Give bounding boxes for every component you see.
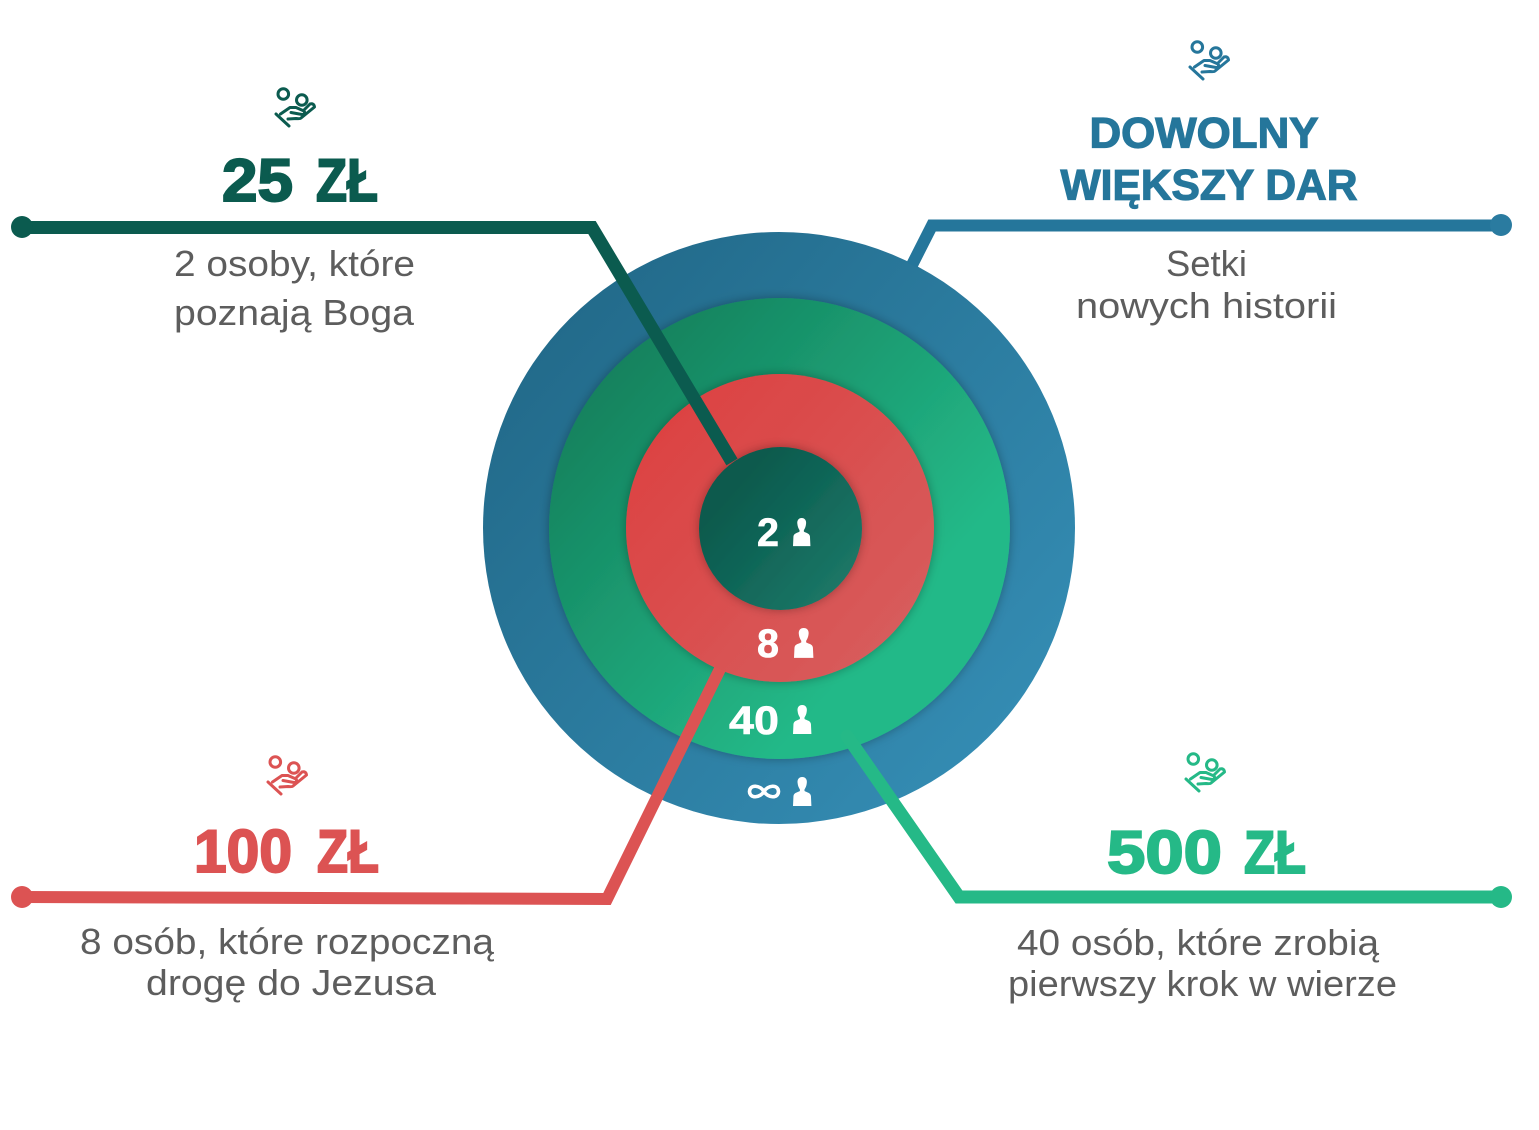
description: 40 people: pierwszy krok w wierze xyxy=(1008,963,1397,1004)
connector: red xyxy=(11,669,720,908)
count label: 2 people: 2 xyxy=(757,511,779,555)
heading: dowolny większy dar xyxy=(1060,110,1358,210)
count label: 2 people xyxy=(757,511,810,555)
panel: 25 zł xyxy=(174,89,415,333)
icon: hand dark green xyxy=(276,89,314,126)
description: 8 people: 8 osób, które rozpoczną xyxy=(80,921,495,962)
count label: 8 people xyxy=(757,622,813,666)
icon: hand red xyxy=(268,757,306,794)
target diagram xyxy=(483,232,1075,824)
panel: 100 zł xyxy=(80,757,495,1003)
description: 8 people xyxy=(80,921,495,1003)
description: 40 people: 40 osób, które zrobią xyxy=(1017,922,1380,963)
heading: 25 zł: ZŁ xyxy=(316,147,378,214)
icon: hand green xyxy=(1186,754,1224,791)
connector: blue xyxy=(912,214,1512,265)
ring: red xyxy=(626,374,934,682)
description: 2 people: poznają Boga xyxy=(174,292,415,333)
heading: 500 zł: 500 xyxy=(1107,819,1222,886)
description: 2 people xyxy=(174,243,415,333)
count label: 40 people xyxy=(729,699,811,743)
heading: 500 zł: ZŁ xyxy=(1244,819,1306,886)
count label: 40 people: 40 xyxy=(729,699,779,743)
description: hundreds xyxy=(1076,243,1337,326)
connector: green xyxy=(847,736,1512,908)
heading: 100 zł: ZŁ xyxy=(317,818,379,885)
description: hundreds: nowych historii xyxy=(1076,285,1337,326)
panel: 500 zł xyxy=(1008,754,1397,1004)
heading: dowolny większy dar: DOWOLNY xyxy=(1090,110,1318,158)
ring: green xyxy=(549,298,1010,759)
description: 2 people: 2 osoby, które xyxy=(174,243,415,284)
panel: dowolny większy dar xyxy=(1060,42,1358,326)
count label: 8 people: 8 xyxy=(757,622,779,666)
heading: 25 zł: 25 xyxy=(222,147,293,214)
ring: dark core xyxy=(699,447,862,610)
connector: dark green xyxy=(11,216,732,462)
description: 8 people: drogę do Jezusa xyxy=(146,962,437,1003)
description: hundreds: Setki xyxy=(1166,243,1247,284)
description: 40 people xyxy=(1008,922,1397,1004)
count label: infinite people xyxy=(750,777,811,806)
heading: dowolny większy dar: WIĘKSZY DAR xyxy=(1060,162,1358,210)
heading: 100 zł: 100 xyxy=(194,818,292,885)
ring: blue outer xyxy=(483,232,1075,824)
icon: hand blue xyxy=(1190,42,1228,79)
